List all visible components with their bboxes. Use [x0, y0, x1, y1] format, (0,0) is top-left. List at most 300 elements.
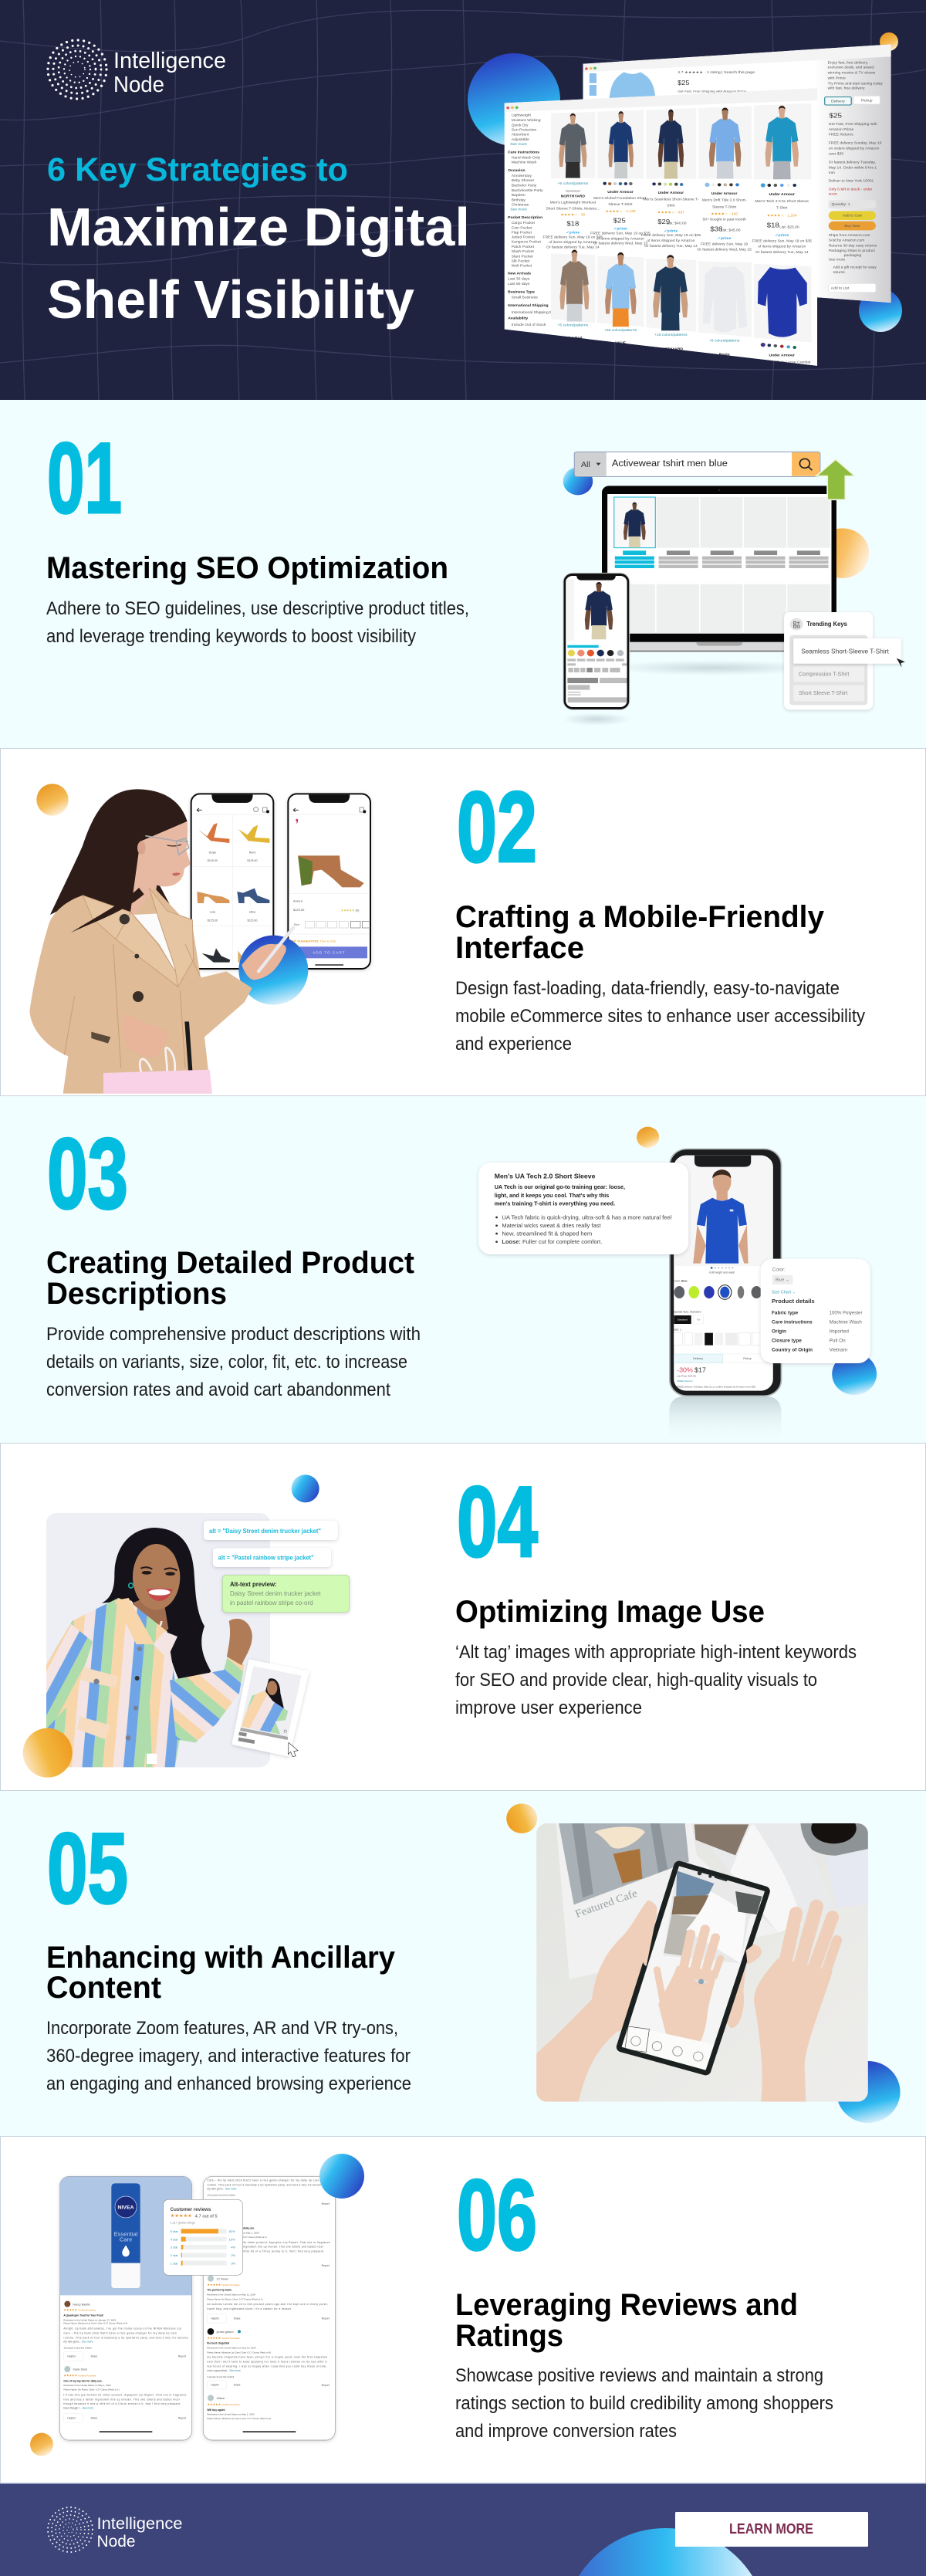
- sidebar filters: Slash Pocket: [512, 249, 534, 253]
- panel: product detail page: Add to Cart: [843, 214, 863, 218]
- product listings: Under Armour: [769, 192, 795, 196]
- product listings: of items shipped by Amazon: [596, 237, 644, 240]
- phone: reviews list: Reviewed in the United States on April 16, 2024: [207, 2347, 256, 2350]
- sidebar filters: Jetted Pocket: [512, 235, 536, 239]
- heading: Content: [46, 1971, 161, 2005]
- product listings: Under Armour: [711, 191, 738, 195]
- body text: [455, 978, 865, 1054]
- panel: product detail page: Returns 30-day easy returns: [829, 244, 877, 247]
- sidebar filters: Welt Pocket: [512, 264, 532, 268]
- illustration: review screens: [30, 2154, 364, 2456]
- sidebar filters: Slit Pocket: [512, 259, 530, 262]
- tag: alt two: alt = "Pastel rainbow stripe jacket": [218, 1554, 314, 1562]
- panel: product detail page: See more: [829, 258, 846, 261]
- card: customer reviews: Customer reviews: [171, 2208, 211, 2212]
- sidebar filters: Include Out of Stock: [512, 323, 546, 327]
- sidebar filters: Moisture Wicking: [512, 118, 541, 122]
- panel: product detail page: Packaging Ships in product: [829, 249, 876, 252]
- body text: and improve conversion rates: [455, 2421, 677, 2442]
- phone: reviews list: 3 people found this helpful: [207, 2375, 235, 2378]
- sidebar filters: Bachelor Party: [512, 184, 537, 187]
- number 04: 04: [457, 1465, 538, 1578]
- product photos: [559, 105, 807, 337]
- panel: product detail page: Enjoy fast, free delivery,: [828, 61, 868, 65]
- card: customer reviews: [164, 2199, 242, 2275]
- phone: Edit height and waist: [709, 1271, 735, 1274]
- panel: search results page: [505, 88, 817, 366]
- product listings: Short Sleeve T-Shirts, Moistur...: [546, 207, 600, 211]
- product listings: Men's Tech 2.0 5c Short Sleeve: [755, 199, 809, 203]
- sidebar filters: Cargo Pocket: [512, 221, 536, 225]
- panel: section 06 reviews: [0, 2137, 926, 2483]
- sidebar filters: Flap Pocket: [512, 231, 532, 235]
- panel: product detail page: soon.: [829, 192, 838, 196]
- phone: reviews list: on May 1, 2024: [243, 2231, 259, 2234]
- product listings: ★★★★☆ · 440: [711, 212, 738, 215]
- heading: Descriptions: [46, 1277, 227, 1311]
- phone: reviews list: ★★★★★ Verified Purchase: [207, 2402, 240, 2406]
- sidebar filters: Baby Shower: [512, 178, 535, 182]
- panel: product detail page: FREE Returns: [829, 133, 853, 137]
- title: 6 Key Strategies to: [47, 151, 348, 188]
- review text: though because it has a little bit of a Citrus aroma to it, that I find very pleasant.: [63, 2402, 181, 2405]
- tag: alt one: alt = "Daisy Street denim trucker jacket": [209, 1527, 321, 1535]
- card: customer reviews: 3 star: [171, 2246, 178, 2249]
- sidebar filters: Coin Pocket: [512, 226, 532, 229]
- heading: Leveraging Reviews and: [455, 2288, 798, 2322]
- product listings: $38: [710, 225, 722, 232]
- phone: reviews list: ★★★★★ Verified Purchase: [207, 2336, 240, 2340]
- product listings: G-Gradual: [563, 336, 582, 340]
- phone: reviews list: my new go-to... See more: [207, 2188, 237, 2191]
- phone: reviews list: Allison: [217, 2397, 225, 2400]
- product listings: [543, 181, 812, 364]
- logo: Intelligence Node: [48, 2507, 182, 2552]
- card: product details: Country of Origin: [772, 1348, 813, 1352]
- product listings: Or fastest delivery Wed, May 15: [593, 242, 648, 245]
- search bar: [574, 452, 820, 476]
- card: thumbnail: [234, 1661, 307, 1757]
- logo: Intelligence Node: Node: [113, 73, 164, 97]
- card: customer reviews: ★★★★★: [171, 2214, 192, 2219]
- phone: reviews list: Will buy again!: [207, 2408, 225, 2412]
- panel: section 05 ancillary: [0, 1791, 926, 2136]
- search bar: All: [581, 461, 590, 469]
- phone: Delivery: [693, 1357, 703, 1360]
- heading: Ratings: [455, 2319, 563, 2353]
- phone: reviews list: An actress turned me on to this product years ago and I've kept one in every purse,: [207, 2303, 328, 2306]
- body text: [46, 2018, 411, 2094]
- phone: reviews list: ★★★★★ Verified Purchase: [207, 2283, 240, 2287]
- product listings: Boxin: [719, 353, 730, 357]
- logo: Intelligence Node: [48, 40, 226, 99]
- product listings: T-Shirt: [776, 206, 788, 210]
- panel: product detail page: with fast, free delivery: [828, 86, 865, 90]
- product listings: of items shipped by Amazon: [758, 245, 806, 248]
- product listings: $18: [767, 222, 779, 229]
- product listings: NORTHYARD: [561, 195, 586, 198]
- card: trending keys: Trending Keys: [806, 620, 847, 628]
- lip balm: NIVEA: [117, 2205, 134, 2210]
- review text: Susie Stout: [73, 2368, 87, 2371]
- product listings: +5 colors/patterns: [558, 323, 589, 327]
- product listings: of items shipped by Amazon: [549, 240, 597, 244]
- sidebar filters: Pocket Description: [508, 215, 542, 219]
- panel: product detail page: returns: [833, 270, 846, 274]
- phone: reviews list: JC Reker: [217, 2277, 229, 2280]
- phone: reviews list: such a good deal... See more: [207, 2369, 241, 2372]
- body text: [455, 2365, 833, 2442]
- product listings: List: $25.00: [779, 225, 799, 228]
- callout: alt-text preview: in pastel rainbow stripe co-ord: [230, 1599, 313, 1606]
- panel: product detail page: Or fastest delivery Tuesday,: [829, 161, 876, 164]
- lip balm: Care: [120, 2236, 132, 2243]
- panel: product detail page: packaging: [844, 253, 862, 257]
- sidebar filters: Availability: [508, 316, 529, 320]
- sidebar filters: Patch Pocket: [512, 245, 535, 249]
- phone: product detail: [288, 794, 371, 969]
- panel: header: [0, 0, 926, 400]
- card: description: Men's UA Tech 2.0 Short Sleeve: [495, 1173, 596, 1180]
- card: customer reviews: 5 star: [171, 2229, 178, 2233]
- review text: free and has a better ingredient line up overall. This one smells and tastes nicer: [63, 2398, 181, 2401]
- sidebar filters: Last 90 days: [508, 282, 530, 286]
- phone: reviews list: few hours of wearing. i was so happy when i saw that you could buy these in bulk,: [207, 2365, 326, 2368]
- phone: reviews list: ingredient line up overall. This one smells and tastes nicer: [243, 2246, 324, 2249]
- panel: product detail page: Get Fast, Free Shipping with Amazon Prime: [678, 90, 747, 93]
- panel: product detail page: Quantity: 1: [832, 202, 850, 206]
- product listings: Men's Global Foundation Short-: [593, 196, 647, 200]
- panel: product detail page: $25: [678, 80, 690, 86]
- phone: product list: Remi: [249, 851, 255, 854]
- icon: blue orb: [292, 1474, 319, 1502]
- body text: ‘Alt tag’ images with appropriate high-intent keywords: [455, 1642, 857, 1663]
- phone: product list: $115.00: [248, 919, 257, 922]
- product listings: ★★★★☆ · 30: [560, 213, 586, 217]
- icon: blue orb: [563, 467, 593, 495]
- body text: and experience: [455, 1034, 572, 1054]
- body text: [46, 1324, 421, 1400]
- panel: product detail page: with Prime: [828, 76, 846, 80]
- icon: search: [799, 459, 812, 470]
- phone: product list: Lara: [210, 911, 216, 914]
- product listings: Under Armour: [658, 191, 684, 195]
- body text: Showcase positive reviews and maintain a strong: [455, 2365, 823, 2386]
- button: learn more: [675, 2512, 868, 2547]
- body text: details on variants, size, color, fit, etc. to increase: [46, 1352, 407, 1373]
- review text: ★★★★★ Verified Purchase: [63, 2373, 96, 2377]
- review text: Alright, lip balm aficionados, I've got the inside scoop on the NIVEA Moisture Lip: [63, 2327, 181, 2330]
- review text: Share: [90, 2354, 97, 2358]
- phone: reviews list: Flavor Name: Moisture Lip Care | Size: 0.17 Ounce (Pack of 4): [207, 2351, 271, 2354]
- card: product details: Imported: [830, 1329, 850, 1334]
- lip balm: Essential: [113, 2231, 138, 2238]
- body text: mobile eCommerce sites to enhance user accessibility: [455, 1006, 865, 1027]
- card: description: UA Tech fabric is quick-drying, ultra-soft & has a more natural feel: [502, 1214, 672, 1220]
- lip balm: [111, 2183, 140, 2288]
- arrow: ranking up: [816, 459, 855, 499]
- panel: product detail page: 4.7 ★★★★★ · 1 rating | Search this page: [678, 70, 755, 75]
- product listings: Shirt: [667, 204, 675, 208]
- icon: orange orb: [880, 32, 898, 51]
- sidebar filters: See more: [510, 208, 527, 212]
- product listings: ✓prime: [664, 229, 678, 232]
- card: description: UA Tech is our original go-to training gear: loose,: [495, 1183, 625, 1190]
- phone: reviews list: Report: [322, 2384, 330, 2387]
- panel: product detail page: Deliver to New York 10001: [829, 179, 874, 182]
- card: product details: Size Chart ⌄: [772, 1291, 796, 1295]
- review text: Reviewed in the United States on January 27, 2024: [63, 2318, 117, 2321]
- search bar: Activewear tshirt men blue: [612, 458, 728, 469]
- phone: reviews list: my favorite chapstick have been using it for a couple years now! the first chapstick: [207, 2356, 327, 2359]
- card: trending keys: [784, 612, 905, 709]
- review text: 10 people found this helpful: [63, 2347, 92, 2350]
- illustration: AR ring try-on photo: [506, 1803, 901, 2123]
- phone: product detail: ★★★★★ (0): [341, 908, 360, 912]
- illustration: woman with alt tags: [23, 1474, 350, 1778]
- icon: blue orb large: [468, 53, 560, 146]
- icon: blue orb: [319, 2154, 364, 2199]
- panel: product detail page: over $35: [829, 152, 843, 155]
- product listings: ★★★★☆ · 1,204: [767, 214, 797, 217]
- phone: reviews list: Reviewed in the United States on May 1, 2024: [207, 2412, 255, 2415]
- sidebar filters: Lightweight: [512, 113, 532, 117]
- body text: 360-degree imagery, and interactive features for: [46, 2046, 411, 2067]
- panel: product detail page: Get Fast, Free Shipping with: [829, 122, 877, 126]
- product listings: $25: [613, 217, 626, 224]
- panel: section 02 mobile: [0, 749, 926, 1096]
- phone: -30%: [677, 1366, 693, 1373]
- product listings: Under Armour: [607, 190, 634, 194]
- photo backdrop: [46, 1513, 270, 1767]
- panel: product detail page: Buy Now: [844, 224, 860, 228]
- phone: product detail: Aurora: [293, 899, 303, 903]
- number 01: 01: [47, 421, 122, 534]
- card: product details: Care instructions: [772, 1320, 813, 1325]
- review text: Helpful: [67, 2354, 76, 2358]
- phone: product list: [191, 794, 273, 969]
- body text: and leverage trending keywords to boost visibility: [46, 626, 416, 647]
- review text: Helpful: [67, 2416, 76, 2419]
- shopping bag: [103, 1048, 212, 1094]
- phone: product list: $125.00: [208, 919, 218, 922]
- product listings: 50+ bought in past month: [703, 218, 746, 221]
- product listings: FREE delivery Sun, May 19 on $35: [641, 233, 701, 237]
- sidebar filters: Kangaroo Pocket: [512, 240, 542, 244]
- title: [47, 151, 470, 330]
- icon: orange orb: [506, 1803, 537, 1833]
- hand: left: [536, 1901, 761, 2102]
- review text: Even though I... See more: [63, 2407, 93, 2410]
- body text: [455, 1642, 857, 1718]
- callout: alt-text preview: [222, 1575, 350, 1613]
- phone: reviews list: its sister product, Aquaphor Lip Repair. That one is fragrance: [243, 2241, 330, 2244]
- icon: orange orb: [23, 1728, 73, 1778]
- panel: product detail page: Add to List: [831, 286, 850, 289]
- product listings: ✓prime: [566, 231, 580, 235]
- product listings: Men's Lightweight Workout: [550, 201, 596, 205]
- person: woman in striped jacket: [46, 1528, 252, 1767]
- review text: Flavor Name: No Flavor | Size: 0.17 Ounce (Pack of 1): [63, 2388, 120, 2392]
- heading: Mastering SEO Optimization: [46, 551, 448, 585]
- card: product details: [761, 1259, 870, 1363]
- review text: A Quadruple Treat for Your Pout!: [63, 2314, 103, 2317]
- product listings: Or fastest delivery Tue, May 14: [644, 244, 698, 248]
- card: product details: Blue ⌄: [776, 1278, 789, 1282]
- phone: FREE delivery Tuesday, May 21 on orders shipped by Amazon over $35: [677, 1385, 755, 1388]
- card: product details: Product details: [772, 1298, 815, 1305]
- icon: orange orb: [36, 784, 69, 816]
- panel: product detail page: Only 5 left in stock - order: [829, 188, 873, 191]
- icon: blue orb small: [859, 289, 902, 332]
- review text: Share: [90, 2416, 97, 2419]
- phone: product detail: FIT SUGGESTION: True to size: [292, 939, 336, 943]
- heading: Creating Detailed Product: [46, 1246, 414, 1280]
- tag: alt one: [204, 1521, 338, 1540]
- body text: ratings section to build credibility among shoppers: [455, 2393, 833, 2414]
- icon: orange orb: [816, 528, 869, 578]
- phone: reviews list: the best chapstick: [207, 2342, 230, 2345]
- swatches: [603, 182, 796, 349]
- card: customer reviews: 2%: [231, 2253, 236, 2257]
- product listings: FREE delivery Sun, May 19: [701, 242, 749, 245]
- panel: product detail page: [583, 44, 891, 303]
- sidebar filters: Adjustable: [512, 137, 529, 141]
- card: description: Loose: Fuller cut for complete comfort.: [502, 1238, 602, 1245]
- card: trending keys: Seamless Short-Sleeve T-Shirt: [801, 648, 889, 655]
- sidebar filters: Bachelorette Party: [512, 188, 543, 192]
- product listings: of items shipped by Amazon: [647, 239, 695, 242]
- illustration: woman with phones: [29, 784, 371, 1094]
- button: learn more: LEARN MORE: [729, 2521, 813, 2537]
- number 02: 02: [457, 770, 537, 883]
- sidebar filters: Slant Pocket: [512, 255, 533, 258]
- card: customer reviews: 10%: [229, 2237, 235, 2241]
- card: product details: Machine Wash: [830, 1320, 862, 1325]
- panel: product detail page: winning movies & TV shows: [828, 71, 876, 74]
- product listings: ✓prime: [775, 233, 789, 237]
- card: trending keys: Short Sleeve T-Shirt: [799, 689, 848, 696]
- phone: FREE Returns: [677, 1379, 693, 1383]
- heading: [46, 1246, 414, 1311]
- review text: I'd rate this just behind its sister product, Aquaphor Lip Repair. That one is fragrance: [63, 2394, 186, 2397]
- phone: reviews list: 10 people found this helpful: [207, 2194, 235, 2197]
- phone: Special Size: Standard: [673, 1311, 701, 1314]
- phone: reviews list: [203, 2176, 335, 2440]
- panel: product detail page: exclusive deals, and award-: [828, 66, 875, 69]
- heading: [455, 2288, 798, 2353]
- review text: Report: [178, 2417, 186, 2420]
- review text: Care – the lip balm stick that's been a true game-changer for my daily lip care: [63, 2331, 177, 2334]
- panel: product detail page: FREE delivery Sunday, May 19: [829, 141, 882, 145]
- panel: product detail page: min: [829, 171, 835, 174]
- logo: Intelligence Node: Intelligence: [97, 2514, 182, 2533]
- review text: my new go-to... See more: [63, 2341, 93, 2344]
- phone: reviews list: Report: [322, 2202, 330, 2205]
- sidebar filters: Machine Wash: [512, 161, 537, 164]
- product listings: Or fastest delivery Tue, May 14: [546, 245, 600, 249]
- product listings: Under Armour: [769, 354, 795, 357]
- heading: [455, 900, 825, 965]
- hand: right: [754, 1906, 837, 2102]
- card: product details: 100% Polyester: [830, 1311, 862, 1315]
- phone: reviews list: ever that i don't have to keep applying nor does it leave residue on my lips after a: [207, 2360, 326, 2363]
- phone: reviews list: Flavor Name: No Flavor | Size: 0.17 Ounce (Pack of 1): [207, 2297, 263, 2300]
- card: customer reviews: 1,217 global ratings: [171, 2222, 195, 2225]
- review text: ★★★★★ Verified Purchase: [63, 2308, 96, 2312]
- panel: footer: [0, 2483, 926, 2576]
- icon: orange orb: [30, 2433, 53, 2456]
- phone: Standard: [678, 1318, 688, 1322]
- panel: product detail page: $25: [829, 112, 842, 120]
- product listings: +16 colors/patterns: [654, 333, 688, 337]
- product listings: ✓prime: [718, 236, 732, 240]
- card: trending keys: Compression T-Shirt: [799, 671, 850, 678]
- card: customer reviews: 3%: [231, 2261, 236, 2265]
- phone: product detail: $129.00: [293, 908, 305, 912]
- icon: orange orb: [637, 1127, 659, 1148]
- sidebar filters: Business Type: [508, 290, 535, 293]
- phone: List Price: $24.99: [677, 1374, 696, 1377]
- sidebar filters: Anniversary: [512, 174, 532, 178]
- phone: reviews list: jordan gibson: [216, 2331, 234, 2334]
- body text: conversion rates and avoid cart abandonment: [46, 1379, 390, 1400]
- card: description: New, streamlined fit & shaped hem: [502, 1230, 592, 1237]
- phone: Color: Blue: [673, 1280, 688, 1283]
- product listings: Men's Drift Tide 2.0 Short-: [702, 198, 747, 201]
- card: product details: Fabric type: [772, 1311, 799, 1315]
- phone: reviews list: Report: [322, 2264, 330, 2267]
- review text: Reviewed in the United States on May 1, 2024: [63, 2384, 111, 2387]
- product listings: Men's Range Tech Loose Combat: [753, 361, 811, 364]
- illustration: product page phone: [478, 1127, 877, 1443]
- phone: product detail: Size: [294, 923, 299, 926]
- body text: an engaging and enhanced browsing experience: [46, 2073, 411, 2094]
- sidebar filters: Birthday: [512, 198, 526, 201]
- photo: Featured Cafe: [573, 1887, 639, 1921]
- product listings: ✓prime: [613, 227, 627, 231]
- review text: One of my top two for daily use.: [63, 2379, 103, 2382]
- number 03: 03: [47, 1117, 128, 1230]
- card: product details: Vietnam: [830, 1348, 847, 1352]
- review text: Nancy Badillo: [73, 2303, 90, 2306]
- sidebar filters: Absorbent: [512, 133, 529, 137]
- callout: alt-text preview: Daisy Street denim trucker jacket: [230, 1589, 321, 1597]
- panel: section 04 images: [0, 1444, 926, 1791]
- laptop: [599, 486, 840, 652]
- phone: [563, 573, 630, 709]
- sidebar filters: Last 30 days: [508, 277, 530, 281]
- body text: Incorporate Zoom features, AR and VR try-ons,: [46, 2018, 398, 2039]
- panel: section 01 SEO: [0, 400, 926, 748]
- icon: blue orb: [579, 2528, 752, 2576]
- sidebar filters: New Arrivals: [508, 272, 531, 275]
- card: customer reviews: 1 star: [171, 2261, 178, 2265]
- phone: reviews list: Care – the lip balm stick that's been a true game-changer for my daily lip care: [207, 2179, 319, 2182]
- body text: improve user experience: [455, 1698, 642, 1718]
- product listings: $29: [657, 218, 670, 225]
- phone: reviews list: Share: [234, 2317, 241, 2320]
- number 05: 05: [47, 1812, 128, 1924]
- product listings: HKUF: [615, 341, 626, 345]
- phone: reviews list: travel bag, and nightstand since. It's a classic for a reason.: [207, 2307, 292, 2310]
- card: product details: Pull On: [830, 1339, 846, 1343]
- product listings: Sponsored: [566, 190, 580, 192]
- card: customer reviews: 4%: [231, 2246, 236, 2249]
- product listings: NORTHYARD: [659, 347, 684, 350]
- icon: dotted globe: [48, 40, 106, 99]
- sidebar filters: Small Business: [512, 296, 538, 300]
